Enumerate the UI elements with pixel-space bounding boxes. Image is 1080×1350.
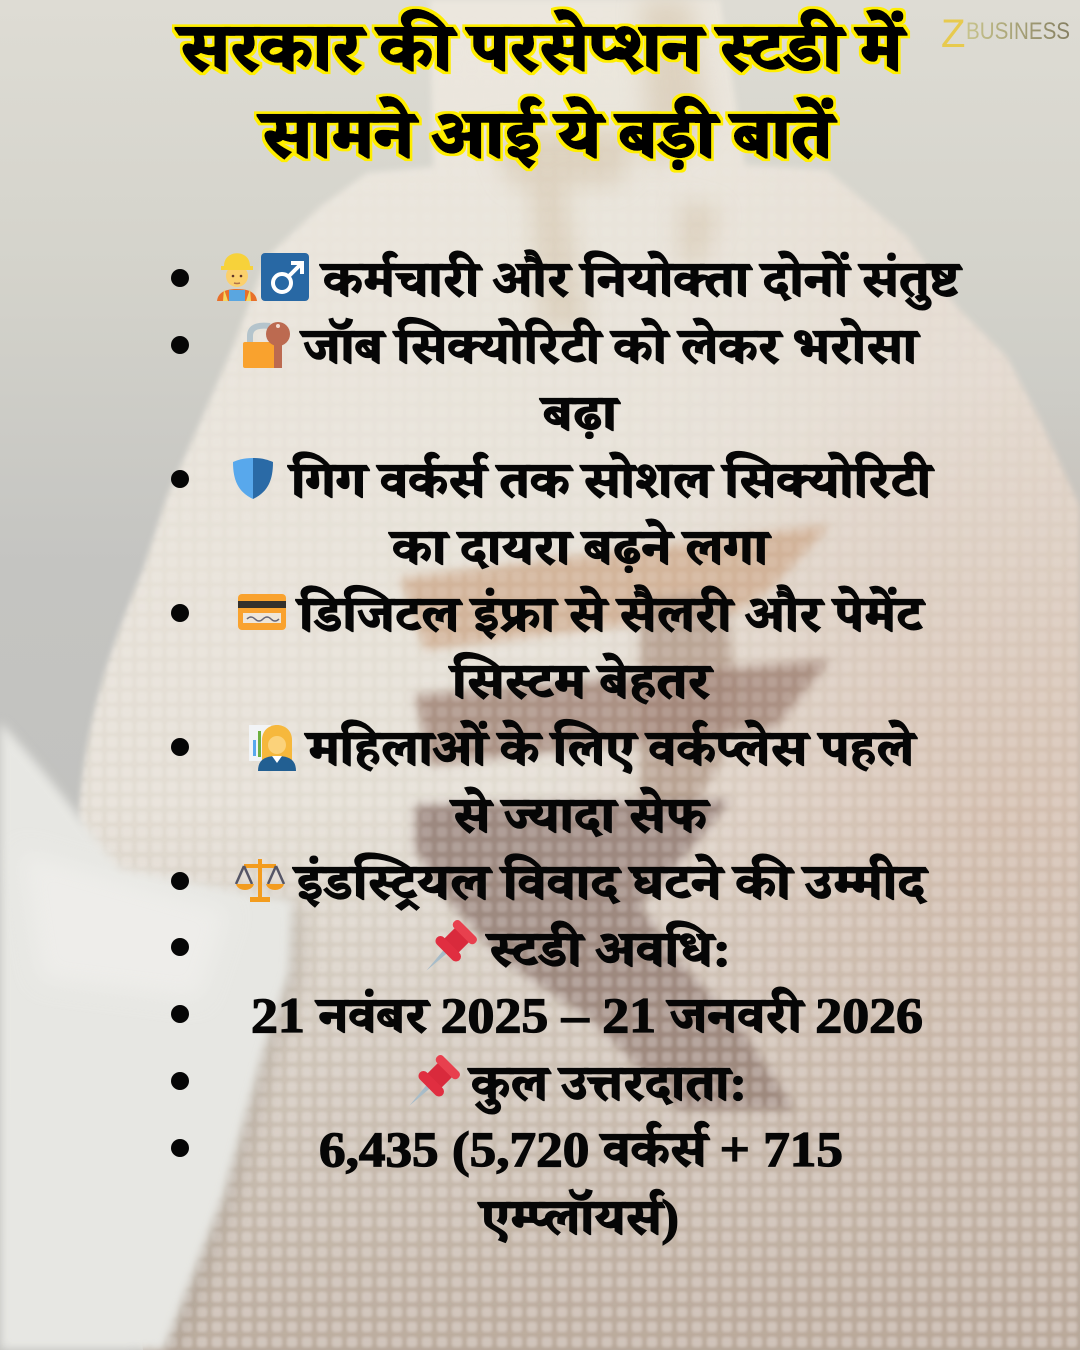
icon: construction worker — [217, 253, 257, 301]
title: सरकार की परसेप्शन स्टडी में — [175, 9, 907, 85]
icon: shield — [233, 458, 273, 499]
rupee symbol on sack — [400, 525, 830, 1110]
list text: कुल उत्तरदाता: — [468, 1055, 747, 1113]
icon: lock with key — [243, 322, 290, 368]
list text: 6,435 (5,720 वर्कर्स + 715 — [319, 1121, 843, 1177]
list text: 21 नवंबर 2025 – 21 जनवरी 2026 — [251, 987, 923, 1043]
list text: का दायरा बढ़ने लगा — [389, 519, 772, 575]
logo: Z Business — [941, 12, 1070, 56]
list text: स्टडी अवधि: — [486, 921, 731, 977]
list text: जॉब सिक्योरिटी को लेकर भरोसा — [300, 318, 921, 374]
icon: pushpin respondents — [398, 1053, 462, 1117]
bullet markers — [171, 269, 189, 1157]
icon: credit card — [238, 594, 286, 630]
list text: गिग वर्कर्स तक सोशल सिक्योरिटी — [288, 452, 935, 508]
icon: male sign — [261, 253, 309, 301]
title: सामने आई ये बड़ी बातें — [257, 96, 837, 172]
list text: सिस्टम बेहतर — [449, 653, 714, 709]
icon: pushpin study — [415, 918, 479, 982]
list text: महिलाओं के लिए वर्कप्लेस पहले — [304, 720, 918, 776]
list text: कर्मचारी और नियोक्ता दोनों संतुष्ट — [320, 251, 963, 309]
list text: से ज्यादा सेफ — [450, 787, 711, 843]
sack neck folds — [490, 0, 720, 330]
list text — [251, 251, 963, 1245]
title — [175, 9, 907, 172]
bullet list — [171, 251, 963, 1245]
icon: woman office worker — [249, 725, 296, 771]
icon: balance scale — [236, 859, 284, 902]
list text: एम्प्लॉयर्स) — [478, 1189, 679, 1245]
list text: डिजिटल इंफ्रा से सैलरी और पेमेंट — [296, 585, 926, 642]
white cloth bottom-left — [0, 722, 300, 1350]
list text: बढ़ा — [540, 385, 621, 441]
logo: Z Business: Z — [941, 12, 965, 56]
list text: इंडस्ट्रियल विवाद घटने की उम्मीद — [293, 853, 928, 910]
